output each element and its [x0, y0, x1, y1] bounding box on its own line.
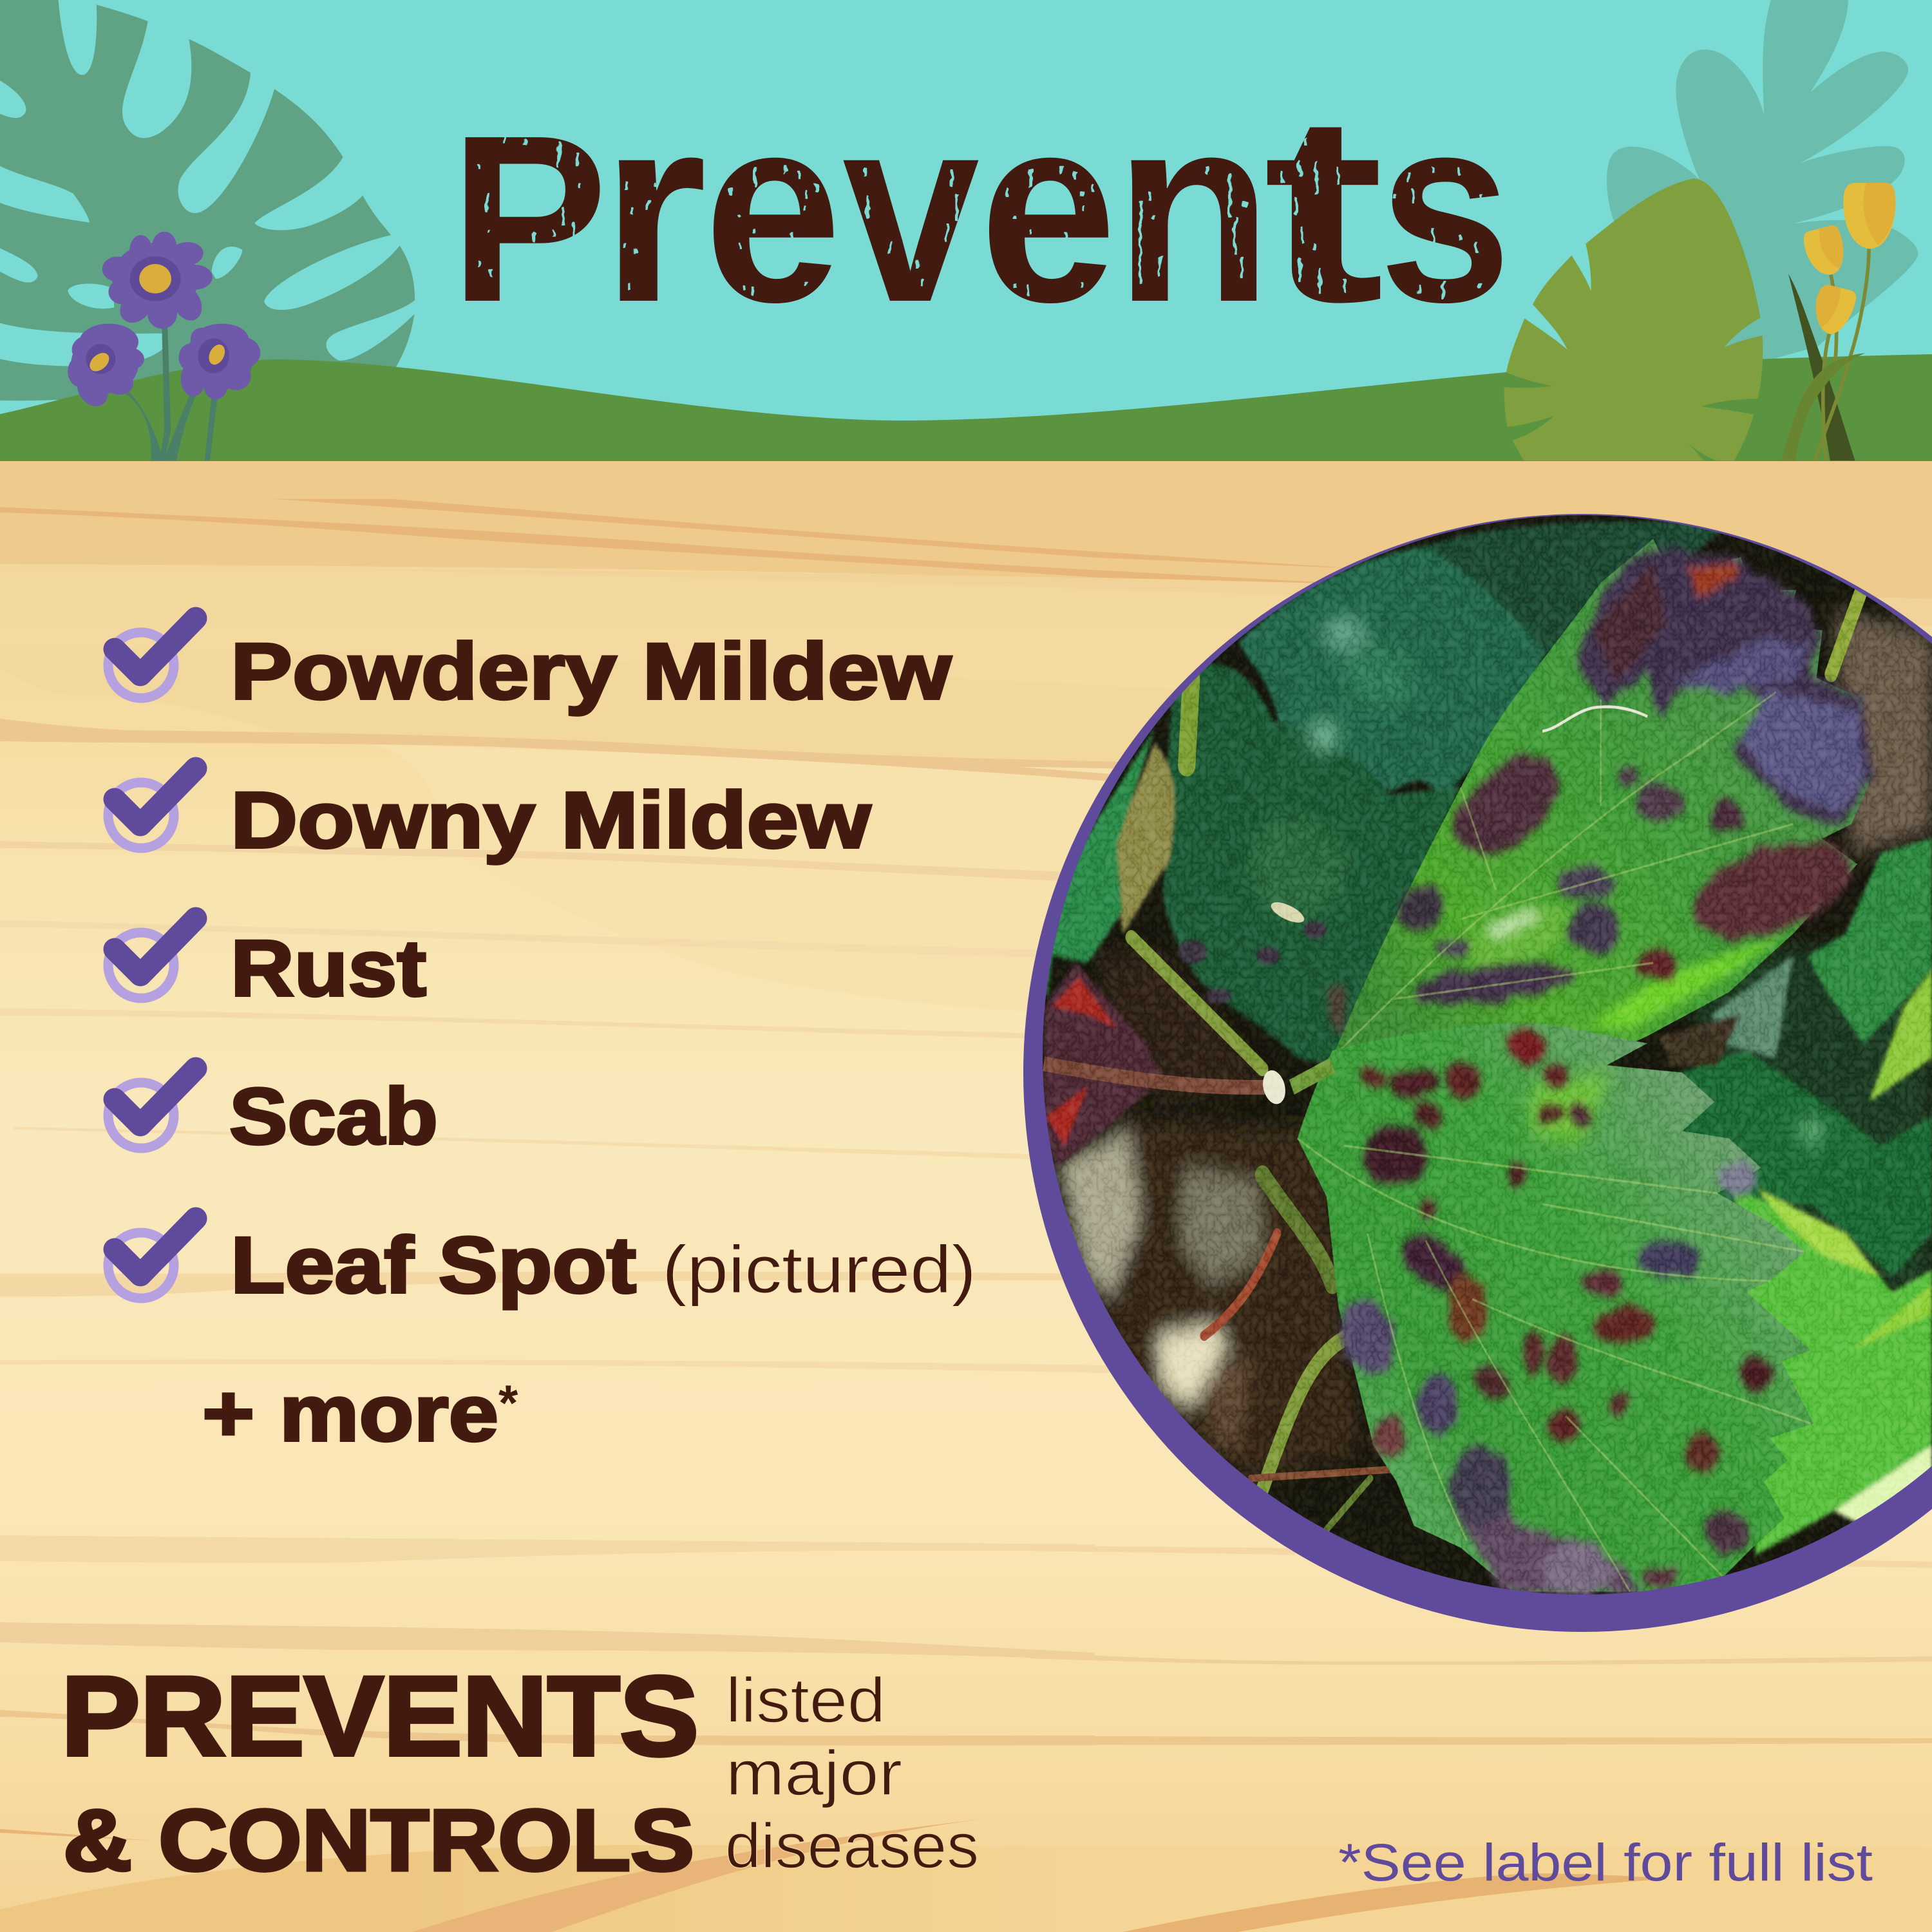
check icon: rust — [108, 918, 196, 998]
green leaf — [1504, 178, 1763, 460]
item: Powdery Mildew: Powdery Mildew — [231, 627, 952, 716]
tulip: tall — [1843, 183, 1895, 249]
green leaf and tulips — [1504, 178, 1895, 460]
text: major: major — [726, 1738, 902, 1808]
photo ring — [1023, 514, 1932, 1632]
flower: right — [178, 324, 260, 399]
monstera leaf — [0, 0, 415, 401]
text: diseases: diseases — [725, 1810, 979, 1881]
heading words: & CONTROLS: & CONTROLS — [63, 1792, 694, 1889]
ground hill — [0, 354, 1932, 461]
tulip stems — [1815, 249, 1869, 460]
claim: prevents and controls — [61, 1654, 979, 1889]
title: r — [601, 60, 707, 357]
header sky — [0, 0, 1932, 461]
note: pictured: (pictured) — [662, 1233, 976, 1307]
item: Scab: Scab — [229, 1072, 438, 1161]
check icon: scab — [108, 1068, 196, 1148]
dark blade — [1788, 274, 1855, 460]
title: v — [842, 60, 981, 357]
title: s — [1379, 60, 1511, 357]
curved blade — [1781, 353, 1865, 460]
flower: left — [68, 324, 144, 409]
tulip: lower — [1816, 285, 1856, 334]
wood background panel — [0, 461, 1932, 1932]
item: Downy Mildew: Downy Mildew — [231, 776, 871, 865]
photo: lower leaflet — [1298, 1023, 1814, 1595]
title: t — [1263, 60, 1385, 357]
photo: upper leaflet — [1328, 539, 1872, 1058]
flower: top — [102, 232, 213, 328]
flower stems — [126, 325, 218, 460]
check icon: downy mildew — [108, 768, 196, 848]
title: P — [450, 86, 608, 352]
background plant right — [1607, 0, 1918, 362]
photo: fine texture — [1018, 502, 1932, 1649]
purple flowers — [68, 232, 260, 460]
item: + more: * — [498, 1374, 518, 1431]
dull leaf highlights — [1251, 618, 1820, 1141]
text: listed: listed — [726, 1665, 886, 1736]
photo: diseased strawberry leaf — [1018, 502, 1932, 1649]
photo stems — [1132, 594, 1861, 1530]
heading word: PREVENTS: PREVENTS — [61, 1654, 699, 1779]
item: Leaf Spot: Leaf Spot — [231, 1221, 636, 1310]
title: e — [704, 60, 842, 357]
photo: node — [1263, 1070, 1285, 1104]
check icon: powdery mildew — [108, 618, 196, 698]
footnote: *See label for full list — [1338, 1833, 1873, 1892]
title distress marks — [478, 137, 1482, 298]
item: + more: + more — [202, 1369, 498, 1458]
title: e — [980, 60, 1117, 357]
item: Rust: Rust — [231, 924, 426, 1013]
tulip: middle — [1804, 225, 1843, 275]
check list — [108, 618, 976, 1458]
photo: red leaflet — [1044, 963, 1163, 1168]
title: n — [1114, 60, 1273, 357]
check icon: leaf spot — [108, 1218, 196, 1298]
